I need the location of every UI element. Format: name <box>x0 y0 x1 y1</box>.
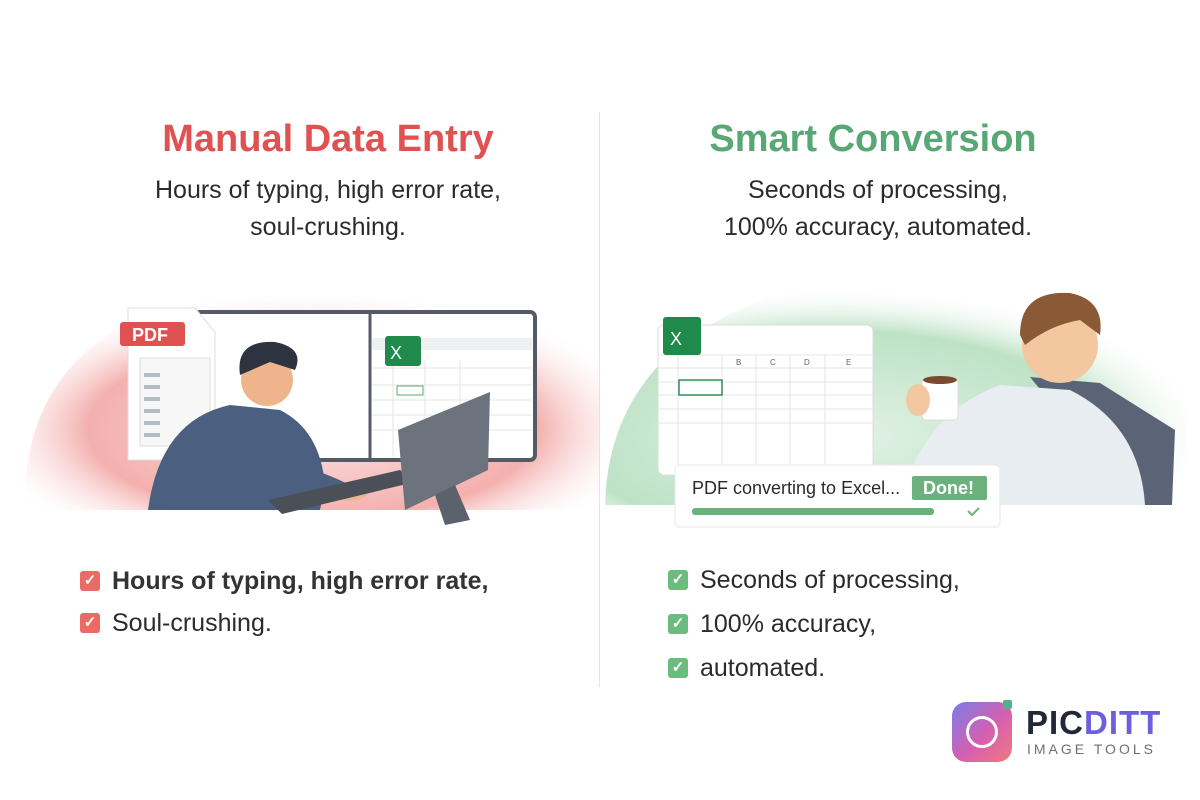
logo: picditt <box>952 700 1161 762</box>
checklist: smart: ✓ <box>672 615 684 632</box>
person <box>148 342 368 510</box>
checklist: manual: Hours of typing, high error rate, <box>112 566 488 594</box>
checklist: manual: ✓ <box>84 614 96 631</box>
subtitle: manual: Hours of typing, high error rate, <box>155 176 501 204</box>
spreadsheet: D <box>804 358 810 367</box>
illustration: manual data entry <box>26 306 599 525</box>
keyboard <box>268 470 415 514</box>
spreadsheet: C <box>770 358 776 367</box>
person relaxed <box>900 293 1175 505</box>
title: smart conversion: Smart Conversion <box>709 118 1037 160</box>
logo text: PICDITT <box>1026 704 1161 741</box>
progress card: Done! <box>923 478 974 498</box>
checklist: smart: 100% accuracy, <box>700 610 876 638</box>
logo: picditt: IMAGE TOOLS <box>1027 741 1156 757</box>
checklist: manual: Soul-crushing. <box>112 608 272 636</box>
subtitle: smart <box>724 176 1032 241</box>
spreadsheet <box>658 317 873 475</box>
subtitle: smart: 100% accuracy, automated. <box>724 213 1032 241</box>
progress card <box>675 465 1000 527</box>
checklist: smart: ✓ <box>672 571 684 588</box>
icon: camera aperture <box>952 702 1012 762</box>
subtitle: smart: Seconds of processing, <box>748 176 1008 204</box>
computer <box>398 392 490 525</box>
progress card: PDF converting to Excel... <box>692 478 900 498</box>
monitor frame: X <box>390 343 402 363</box>
checklist: manual <box>80 566 488 636</box>
pdf doc: PDF <box>132 325 168 345</box>
subtitle: manual: soul-crushing. <box>250 213 406 241</box>
spreadsheet: X <box>670 329 682 349</box>
title: manual data entry: Manual Data Entry <box>162 118 494 160</box>
spreadsheet: E <box>846 358 851 367</box>
subtitle: manual <box>155 176 501 241</box>
checklist: manual: ✓ <box>84 572 96 589</box>
checklist: smart: Seconds of processing, <box>700 566 960 594</box>
pdf doc <box>120 308 215 460</box>
divider <box>599 112 600 687</box>
illustration: smart conversion <box>605 292 1175 528</box>
spreadsheet: B <box>736 358 741 367</box>
monitor frame <box>195 312 535 460</box>
checklist: smart: automated. <box>700 654 825 682</box>
checklist: smart: ✓ <box>672 659 684 676</box>
checklist: smart <box>668 566 960 682</box>
